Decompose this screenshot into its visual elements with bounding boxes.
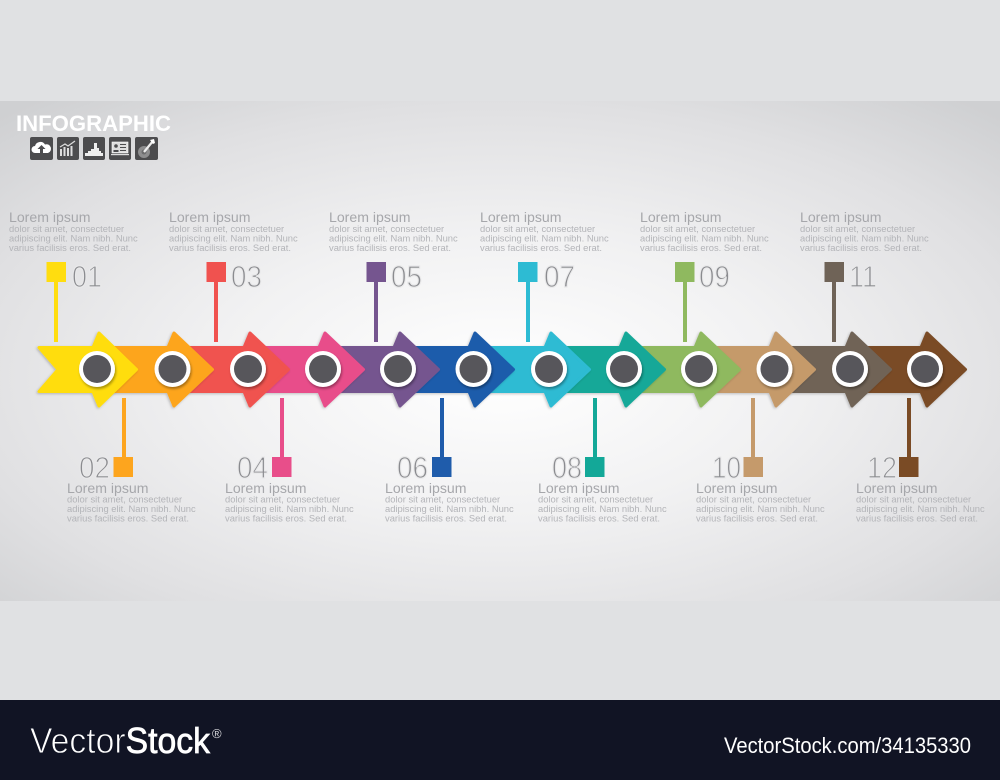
step 08: dolor sit amet, consectetuer (538, 494, 653, 504)
step 12: varius facilisis eros. Sed erat. (856, 512, 978, 524)
step 10 (696, 398, 825, 524)
step 02: adipiscing elit. Nam nibh. Nunc (67, 503, 196, 514)
arrow 09 (634, 333, 740, 406)
step 03 (169, 209, 298, 342)
step 10: varius facilisis eros. Sed erat. (696, 512, 818, 524)
arrow 06 (408, 333, 514, 406)
arrow 07 (484, 333, 590, 406)
step 05: adipiscing elit. Nam nibh. Nunc (329, 232, 458, 244)
footer bar (0, 700, 1000, 780)
step 10: dolor sit amet, consectetuer (696, 494, 811, 504)
footer logo: VectorStock (30, 720, 211, 761)
arrow 10 (709, 333, 814, 406)
step 02: varius facilisis eros. Sed erat. (67, 512, 189, 524)
step 10: Lorem ipsum (696, 480, 777, 496)
step 02: dolor sit amet, consectetuer (67, 494, 182, 504)
step 11: adipiscing elit. Nam nibh. Nunc (800, 232, 929, 244)
ring 10 (756, 351, 792, 387)
step 05 (329, 209, 458, 342)
step 04: varius facilisis eros. Sed erat. (225, 512, 347, 524)
arrow 08 (559, 333, 664, 406)
step 08 (538, 398, 667, 524)
step 04: 04 (237, 450, 268, 485)
step 02: 02 (79, 450, 110, 485)
step 03: adipiscing elit. Nam nibh. Nunc (169, 232, 298, 244)
ring 06 (456, 351, 492, 387)
step 05: Lorem ipsum (329, 209, 410, 225)
ring 05 (380, 351, 416, 387)
step 08: 08 (552, 450, 582, 485)
step 09: varius facilisis eros. Sed erat. (640, 242, 762, 253)
step 06: 06 (397, 450, 428, 485)
arrow 05 (333, 333, 438, 406)
step 05: varius facilisis eros. Sed erat. (329, 242, 451, 253)
ring 01 (79, 351, 115, 387)
step 11: dolor sit amet, consectetuer (800, 223, 915, 234)
step 07: dolor sit amet, consectetuer (480, 223, 595, 234)
footer image id: VectorStock.com/34135330 (724, 733, 971, 758)
step 11: 11 (849, 259, 877, 294)
step 09: dolor sit amet, consectetuer (640, 223, 755, 234)
arrow 04 (258, 333, 364, 406)
step 06: Lorem ipsum (385, 480, 466, 496)
step 06: dolor sit amet, consectetuer (385, 494, 500, 504)
step 12: dolor sit amet, consectetuer (856, 494, 971, 504)
step 03: dolor sit amet, consectetuer (169, 223, 284, 234)
step 08: Lorem ipsum (538, 480, 619, 496)
ring 12 (907, 351, 943, 387)
ring 02 (154, 351, 190, 387)
ring 07 (531, 351, 567, 387)
step 07: 07 (544, 259, 575, 294)
step 10: adipiscing elit. Nam nibh. Nunc (696, 503, 825, 514)
step 01: varius facilisis eros. Sed erat. (9, 242, 131, 253)
step 09: Lorem ipsum (640, 209, 721, 225)
icon: id card (109, 137, 131, 160)
ring 03 (230, 351, 266, 387)
step 11: Lorem ipsum (800, 209, 881, 225)
step 08: varius facilisis eros. Sed erat. (538, 512, 660, 524)
step 09 (640, 209, 769, 342)
step 09: 09 (699, 259, 730, 294)
step 07: adipiscing elit. Nam nibh. Nunc (480, 232, 609, 244)
step 12: adipiscing elit. Nam nibh. Nunc (856, 503, 985, 514)
step 10: 10 (712, 450, 741, 485)
step 09: adipiscing elit. Nam nibh. Nunc (640, 232, 769, 244)
step 06: adipiscing elit. Nam nibh. Nunc (385, 503, 514, 514)
background panel (0, 101, 1000, 601)
step 07: Lorem ipsum (480, 209, 561, 225)
step 04: dolor sit amet, consectetuer (225, 494, 340, 504)
icon: target and dart (135, 137, 158, 160)
step 04: Lorem ipsum (225, 480, 306, 496)
icon: cloud upload (30, 137, 53, 160)
step 04 (225, 398, 354, 524)
arrow 11 (785, 333, 890, 406)
step 06: varius facilisis eros. Sed erat. (385, 512, 507, 524)
icon row (30, 137, 158, 160)
step 03: 03 (231, 259, 262, 294)
ring 09 (681, 351, 717, 387)
step 07: varius facilisis eros. Sed erat. (480, 242, 602, 253)
step 06 (385, 398, 514, 524)
arrow 12 (860, 333, 966, 406)
step 01: adipiscing elit. Nam nibh. Nunc (9, 232, 138, 244)
timeline rings (79, 351, 943, 387)
step 03: varius facilisis eros. Sed erat. (169, 242, 291, 253)
step 05: dolor sit amet, consectetuer (329, 223, 444, 234)
step 03: Lorem ipsum (169, 209, 250, 225)
step 05: 05 (391, 259, 422, 294)
icon: bar chart (83, 137, 105, 160)
step 11: varius facilisis eros. Sed erat. (800, 242, 922, 253)
arrow 01 (39, 333, 136, 406)
step 04: adipiscing elit. Nam nibh. Nunc (225, 503, 354, 514)
arrow 02 (108, 333, 212, 406)
step 12 (856, 398, 985, 524)
step 01: dolor sit amet, consectetuer (9, 223, 124, 234)
icon: growth chart (57, 137, 79, 160)
arrow 03 (183, 333, 288, 406)
ring 08 (606, 351, 642, 387)
top margin band (0, 0, 1000, 101)
step 08: adipiscing elit. Nam nibh. Nunc (538, 503, 667, 514)
step 01: 01 (72, 259, 102, 294)
ring 11 (832, 351, 868, 387)
timeline arrows (39, 333, 966, 406)
step 01 (9, 209, 138, 342)
lower margin band (0, 601, 1000, 700)
step 12: Lorem ipsum (856, 480, 937, 496)
step 11 (800, 209, 929, 342)
step 02 (67, 398, 196, 524)
title: INFOGRAPHIC (16, 111, 171, 136)
step 02: Lorem ipsum (67, 480, 148, 496)
ring 04 (305, 351, 341, 387)
step 12: 12 (867, 450, 897, 485)
step 01: Lorem ipsum (9, 209, 90, 225)
footer registered mark: ® (212, 726, 222, 741)
step 07 (480, 209, 609, 342)
